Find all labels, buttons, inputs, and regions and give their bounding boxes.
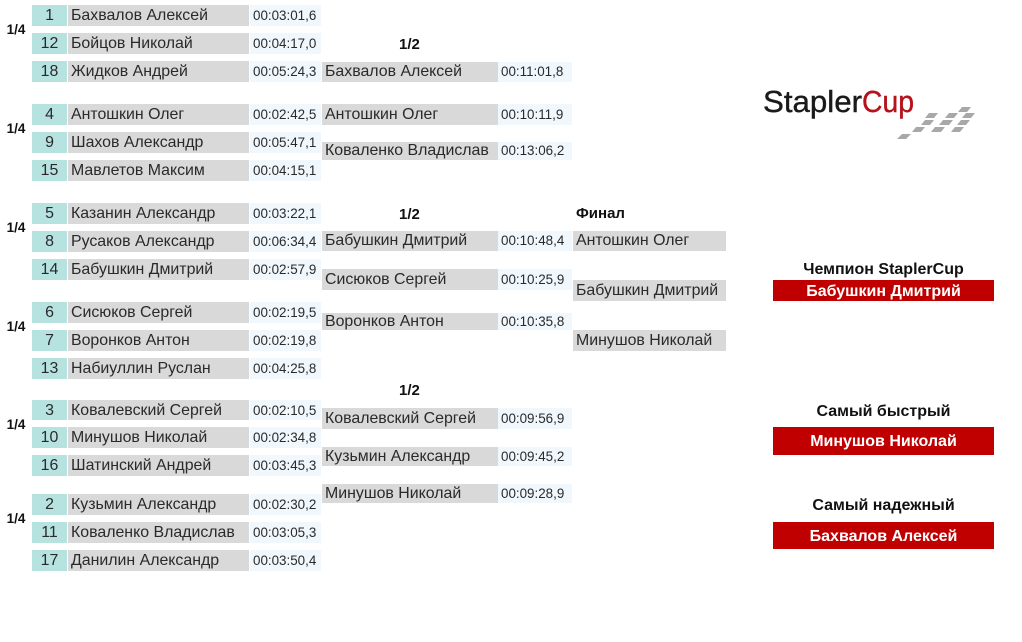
semifinal row: Минушов <box>322 484 572 503</box>
row: 1 <box>32 5 321 26</box>
winner: fastest <box>773 427 994 455</box>
semifinal row: Бабушкин: Бабушкин Дмитрий <box>325 232 467 249</box>
semifinal row: Ковалевский: Ковалевский Сергей <box>325 410 476 427</box>
row: 8 <box>32 231 321 252</box>
heading: semifinal 3: 1/2 <box>399 382 420 399</box>
row: 16: 00:03:45,3 <box>253 458 316 473</box>
logo: StaplerCup: Cup <box>862 84 914 119</box>
row: 14: 00:02:57,9 <box>253 262 316 277</box>
semifinal row: Бахвалов <box>322 62 572 82</box>
row: 1: Бахвалов Алексей <box>71 7 208 24</box>
semifinal row: Коваленко: Коваленко Владислав <box>325 142 489 159</box>
row: 13: 13 <box>41 360 58 377</box>
group 5 label: 1/4 <box>7 417 25 432</box>
row: 14: Бабушкин Дмитрий <box>71 261 213 278</box>
semifinal row: Бахвалов: Бахвалов Алексей <box>325 63 462 80</box>
row: 9: 00:05:47,1 <box>253 135 316 150</box>
row: 7: 00:02:19,8 <box>253 333 316 348</box>
heading: champion: Чемпион StaplerCup <box>803 261 964 278</box>
row: 18: Жидков Андрей <box>71 63 188 80</box>
row: 2: 2 <box>45 496 54 513</box>
semifinal row: Воронков: Воронков Антон <box>325 313 444 330</box>
row: 15: Мавлетов Максим <box>71 162 205 179</box>
semifinal row: Воронков: 00:10:35,8 <box>501 314 564 329</box>
row: 12: 12 <box>41 35 58 52</box>
row: 4: 4 <box>45 106 54 123</box>
winner: champion <box>773 280 994 301</box>
row: 7: 7 <box>45 332 54 349</box>
semifinal row: Сисюков: 00:10:25,9 <box>501 272 564 287</box>
row: 8: Русаков Александр <box>71 233 214 250</box>
row: 3 <box>32 400 321 420</box>
row: 11: Коваленко Владислав <box>71 524 235 541</box>
row: 13: 00:04:25,8 <box>253 361 316 376</box>
semifinal row: Кузьмин: Кузьмин Александр <box>325 448 470 465</box>
row: 16 <box>32 455 321 476</box>
row: 9: 9 <box>45 134 54 151</box>
row: 13 <box>32 358 321 379</box>
row: 3: Ковалевский Сергей <box>71 402 222 419</box>
final: Минушов: Минушов Николай <box>576 332 712 349</box>
semifinal row: Антошкин: 00:10:11,9 <box>501 107 563 122</box>
semifinal row: Минушов: 00:09:28,9 <box>501 486 564 501</box>
row: 12 <box>32 33 321 54</box>
semifinal row: Бабушкин <box>322 231 572 251</box>
logo: StaplerCup <box>763 84 975 139</box>
row: 10 <box>32 427 321 448</box>
semifinal row: Антошкин: Антошкин Олег <box>325 106 438 123</box>
semifinal row: Бахвалов: 00:11:01,8 <box>501 64 563 79</box>
semifinal row: Бабушкин: 00:10:48,4 <box>501 233 564 248</box>
row: 11: 11 <box>41 524 58 541</box>
row: 5: Казанин Александр <box>71 205 215 222</box>
semifinal row: Коваленко <box>322 142 572 160</box>
row: 9 <box>32 132 321 153</box>
heading: semifinal 1: 1/2 <box>399 36 420 53</box>
winner: most reliable: Бахвалов Алексей <box>810 528 957 545</box>
row: 12: 00:04:17,0 <box>253 36 316 51</box>
heading: semifinal 2: 1/2 <box>399 206 420 223</box>
semifinal row: Минушов: Минушов Николай <box>325 485 461 502</box>
row: 2: Кузьмин Александр <box>71 496 216 513</box>
semifinal row: Кузьмин: 00:09:45,2 <box>501 449 564 464</box>
row: 10: 10 <box>41 429 58 446</box>
row: 17: 17 <box>41 552 58 569</box>
row: 11: 00:03:05,3 <box>253 525 316 540</box>
row: 17: 00:03:50,4 <box>253 553 316 568</box>
logo: StaplerCup: Stapler <box>763 84 862 119</box>
row: 10: Минушов Николай <box>71 429 207 446</box>
row: 2: 00:02:30,2 <box>253 497 316 512</box>
row: 5: 5 <box>45 205 54 222</box>
heading: most reliable: Самый надежный <box>812 497 955 514</box>
group 4 label: 1/4 <box>7 319 25 334</box>
row: 12: Бойцов Николай <box>71 35 193 52</box>
row: 14: 14 <box>41 261 58 278</box>
winner: champion: Бабушкин Дмитрий <box>806 283 961 300</box>
row: 9: Шахов Александр <box>71 134 203 151</box>
row: 5 <box>32 203 321 224</box>
semifinal row: Воронков <box>322 313 572 330</box>
group 2 label: 1/4 <box>7 121 25 136</box>
row: 18 <box>32 61 321 82</box>
row: 4: 00:02:42,5 <box>253 107 316 122</box>
heading: final: Финал <box>576 205 625 222</box>
semifinal row: Сисюков: Сисюков Сергей <box>325 271 446 288</box>
row: 15: 00:04:15,1 <box>253 163 316 178</box>
final: Бабушкин: Бабушкин Дмитрий <box>576 282 718 299</box>
row: 15: 15 <box>41 162 58 179</box>
row: 6: 6 <box>45 304 54 321</box>
row: 16: 16 <box>41 457 58 474</box>
heading: fastest: Самый быстрый <box>816 403 950 420</box>
row: 6: Сисюков Сергей <box>71 304 192 321</box>
row: 16: Шатинский Андрей <box>71 457 211 474</box>
row: 17 <box>32 550 321 571</box>
row: 1: 1 <box>45 7 54 24</box>
row: 3: 3 <box>45 402 54 419</box>
group 6 label: 1/4 <box>7 511 25 526</box>
row: 10: 00:02:34,8 <box>253 430 316 445</box>
row: 8: 00:06:34,4 <box>253 234 316 249</box>
row: 7 <box>32 330 321 351</box>
final: Антошкин <box>573 231 726 251</box>
semifinal row: Ковалевский <box>322 408 572 429</box>
row: 2 <box>32 494 321 515</box>
final: Антошкин: Антошкин Олег <box>576 232 689 249</box>
semifinal row: Ковалевский: 00:09:56,9 <box>501 411 564 426</box>
row: 14 <box>32 259 321 280</box>
group 1 label: 1/4 <box>7 22 25 37</box>
semifinal row: Антошкин <box>322 104 572 125</box>
row: 18: 00:05:24,3 <box>253 64 316 79</box>
semifinal row: Сисюков <box>322 269 572 290</box>
semifinal row: Коваленко: 00:13:06,2 <box>501 143 564 158</box>
row: 5: 00:03:22,1 <box>253 206 316 221</box>
row: 3: 00:02:10,5 <box>253 403 316 418</box>
row: 13: Набиуллин Руслан <box>71 360 211 377</box>
row: 17: Данилин Александр <box>71 552 219 569</box>
winner: fastest: Минушов Николай <box>810 433 957 450</box>
group 3 label: 1/4 <box>7 220 25 235</box>
winner: most reliable <box>773 522 994 549</box>
row: 4 <box>32 104 321 125</box>
row: 6 <box>32 302 321 323</box>
row: 6: 00:02:19,5 <box>253 305 316 320</box>
row: 4: Антошкин Олег <box>71 106 184 123</box>
row: 15 <box>32 160 321 181</box>
row: 1: 00:03:01,6 <box>253 8 316 23</box>
row: 7: Воронков Антон <box>71 332 190 349</box>
row: 11 <box>32 522 321 543</box>
semifinal row: Кузьмин <box>322 447 572 466</box>
row: 8: 8 <box>45 233 54 250</box>
row: 18: 18 <box>41 63 58 80</box>
